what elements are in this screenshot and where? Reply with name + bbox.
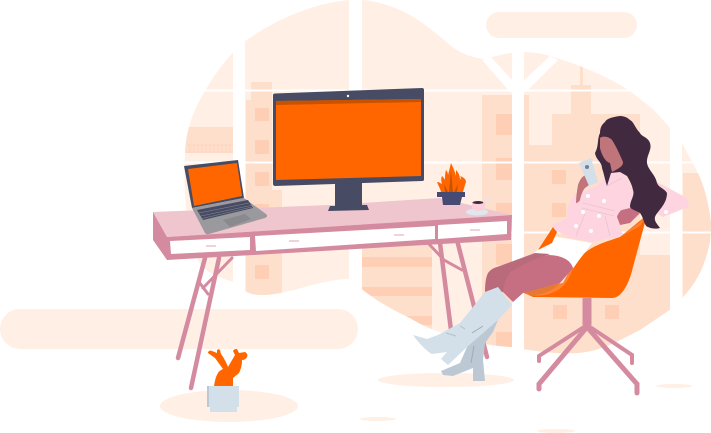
- pill cloud: top: [486, 12, 637, 38]
- monitor stand: [328, 183, 369, 211]
- monitor: [273, 88, 424, 211]
- back boot: [441, 320, 498, 381]
- chair base: [539, 298, 637, 393]
- potted plant: [437, 163, 466, 205]
- window frame: [185, 0, 711, 370]
- cactus pot: [207, 386, 239, 412]
- back of hair: [595, 116, 667, 229]
- fence on left building: [187, 145, 233, 152]
- front boot: [413, 287, 512, 365]
- arm: [576, 175, 589, 203]
- upper leg: [485, 253, 550, 292]
- drawers: [170, 221, 507, 254]
- orange scarf: [538, 227, 557, 250]
- elbow: [617, 208, 640, 225]
- pill cloud: bottom left: [0, 309, 358, 349]
- woman: [413, 116, 689, 381]
- desk front: [153, 212, 512, 260]
- desk top: [153, 198, 512, 237]
- back sleeve: [656, 182, 689, 217]
- desk: [153, 198, 512, 388]
- drawer handles: [206, 230, 480, 246]
- jacket seams: [576, 178, 622, 236]
- laptop: [184, 160, 267, 234]
- city buildings: [185, 66, 711, 370]
- coffee cup: [466, 197, 492, 216]
- shorts: [533, 236, 592, 268]
- face and neck: [600, 137, 623, 172]
- jacket: [552, 172, 634, 242]
- floor shadows: [160, 373, 692, 433]
- woman's chair: [522, 215, 647, 393]
- boot creases: [446, 326, 483, 363]
- jacket buttons: [574, 194, 668, 233]
- monitor screen: [276, 99, 421, 180]
- phone: [579, 158, 598, 186]
- chair shell: [522, 215, 647, 298]
- cactus plant: [207, 349, 247, 412]
- monitor body: [273, 88, 424, 186]
- desk legs: [178, 240, 487, 388]
- building windows: [255, 108, 619, 347]
- lower leg: [503, 255, 573, 302]
- background blob with city view: [184, 0, 711, 354]
